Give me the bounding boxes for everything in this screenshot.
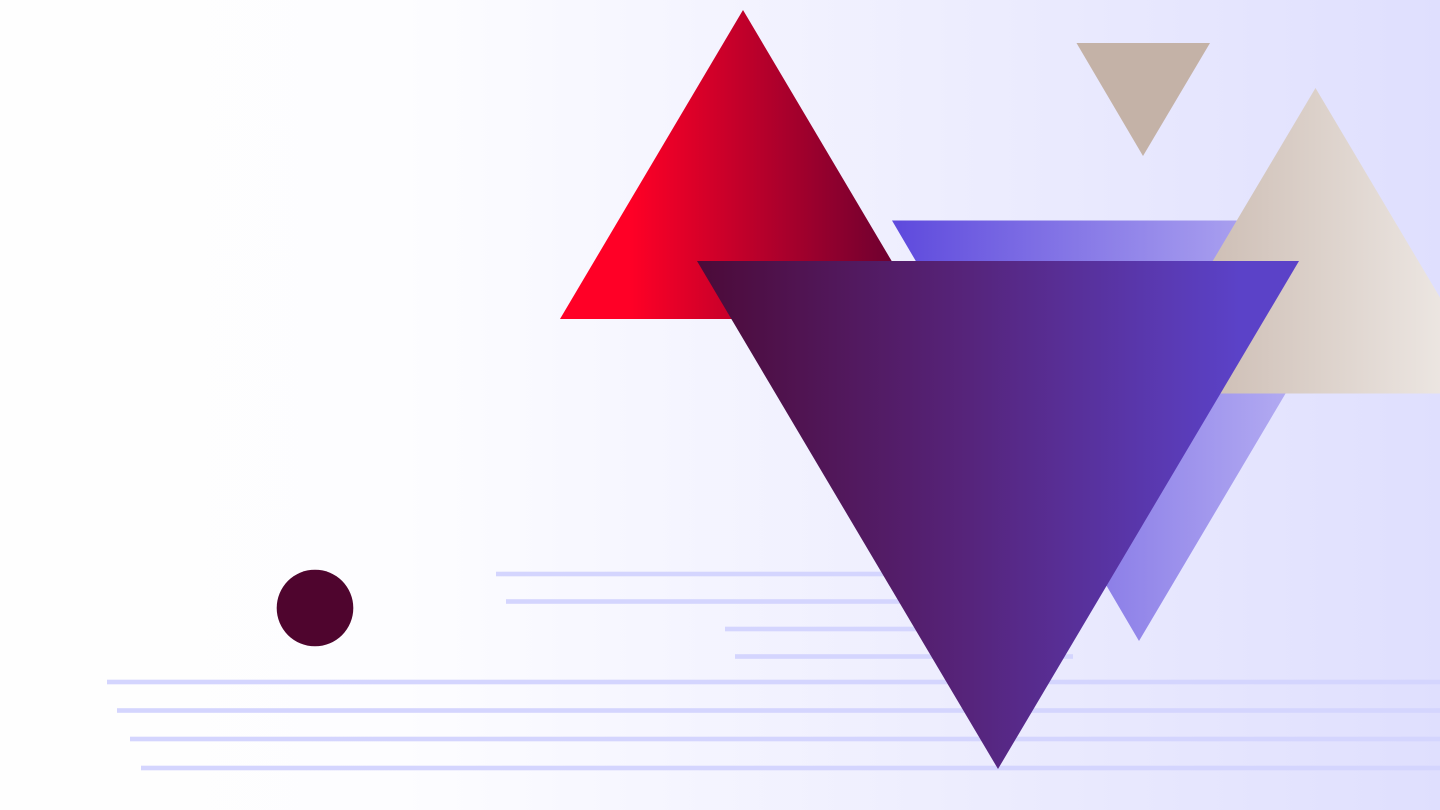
large dark purple triangle [697,261,1299,769]
small tan triangle [1076,43,1210,156]
blue fading triangle [892,220,1388,641]
beige triangle [1134,88,1440,394]
lower long stripes [107,680,1440,770]
circle [277,570,353,646]
red triangle [560,10,926,319]
upper short stripes [496,572,1086,659]
